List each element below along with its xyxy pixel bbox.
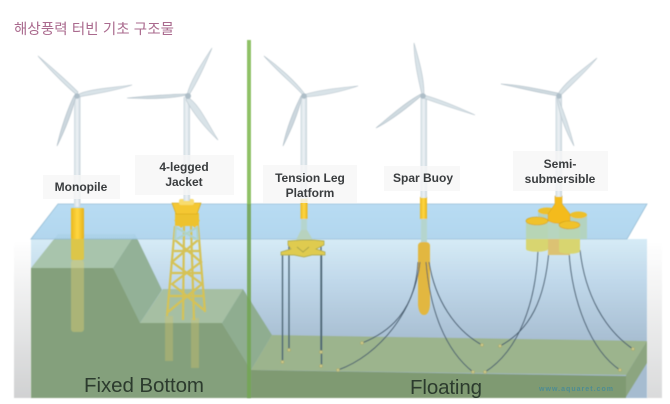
spar buoy foundation [336, 197, 484, 374]
label: Tension Leg Platform: Platform [286, 186, 334, 200]
turbine: monopile [38, 56, 132, 207]
seabed: fixed bottom [31, 234, 272, 398]
semi-submersible foundation [484, 196, 634, 374]
rear columns [538, 211, 556, 239]
turbine: tension leg platform [264, 56, 358, 199]
label: 4-legged Jacket: 4-legged [159, 160, 209, 174]
label: Semi-submersible: submersible [525, 172, 596, 186]
label: Spar Buoy: Spar Buoy [393, 171, 453, 185]
turbine: spar buoy [376, 43, 475, 198]
background side shading [14, 240, 662, 398]
central cone [548, 196, 570, 224]
label: Tension Leg Platform [263, 165, 357, 203]
label: Monopile [43, 175, 120, 199]
jacket foundation [165, 199, 205, 368]
label: Monopile: Monopile [55, 180, 108, 194]
anchors [281, 348, 322, 368]
heading: Floating: Floating [410, 376, 482, 399]
title: 해상풍력 터빈 기초 구조물 [14, 21, 174, 38]
sea and seabed scene [31, 234, 647, 398]
label: Tension Leg Platform: Tension Leg [275, 171, 345, 185]
turbine: semi-submersible [501, 58, 597, 197]
label: Semi-submersible: Semi- [544, 157, 576, 171]
label: Spar Buoy [384, 166, 460, 191]
water body [31, 239, 647, 398]
front columns [526, 217, 548, 252]
divider: fixed bottom / floating [247, 40, 251, 398]
tension leg platform foundation [281, 198, 325, 368]
turbine: 4-legged jacket [127, 48, 218, 201]
seabed: floating [251, 335, 647, 398]
label: 4-legged Jacket [135, 155, 234, 195]
source url: www.aquaret.com [538, 386, 613, 393]
label: 4-legged Jacket: Jacket [165, 175, 203, 189]
monopile foundation [71, 208, 84, 332]
label: Semi-submersible [513, 151, 608, 191]
heading: Fixed Bottom: Fixed Bottom [84, 374, 204, 397]
water surface [31, 204, 647, 239]
